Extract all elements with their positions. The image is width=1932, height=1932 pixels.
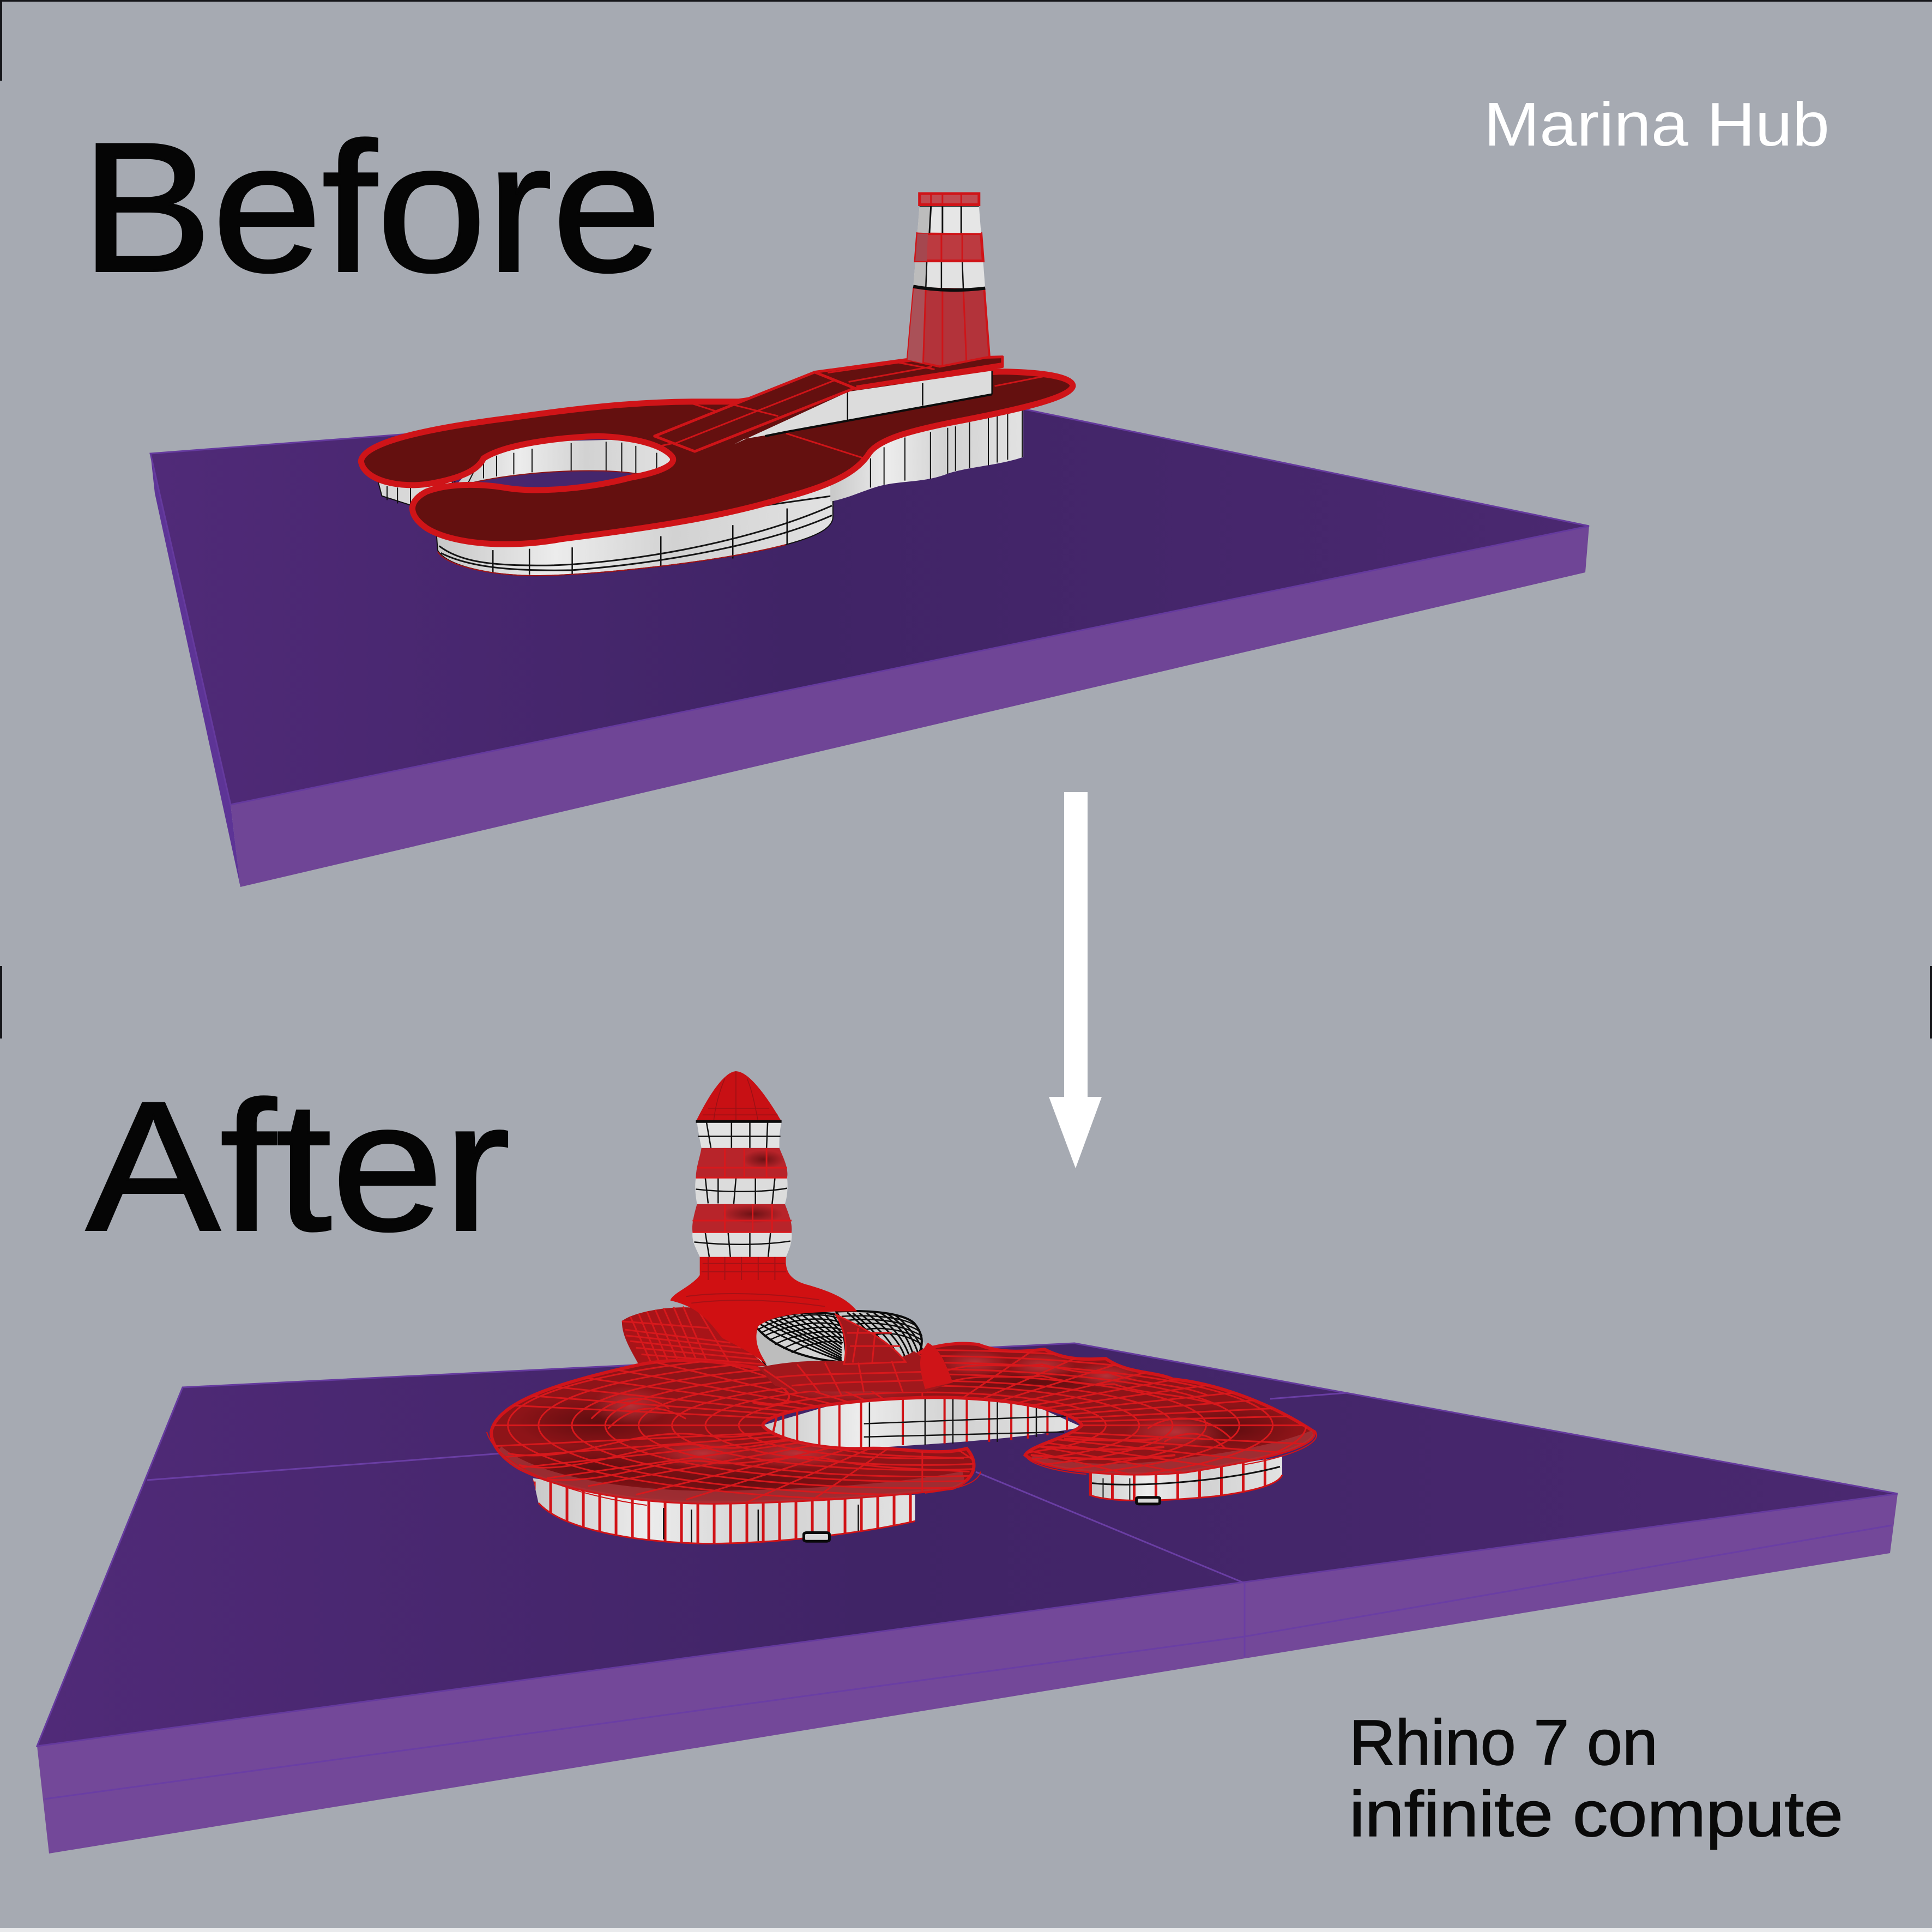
roof surface [491,1344,1314,1503]
heading: Before: Before [81,104,662,310]
tower flared base [671,1257,857,1365]
tower white band upper [697,1122,782,1148]
roof grid radials [495,1353,1305,1502]
left ground wall [533,1478,917,1544]
inner courtyard wall [763,1397,1082,1448]
tower red band [915,234,983,261]
right ground wall [1089,1457,1284,1501]
label: Marina Hub: Marina Hub [1484,90,1830,159]
slab front side [231,526,1589,887]
long block wall [734,371,992,444]
slab seams [45,1393,1892,1799]
shell backing [756,1313,931,1373]
slab side [37,1494,1898,1853]
arch over shells [758,1315,953,1396]
raised roof lobe [622,1307,766,1371]
lighthouse tower [908,194,989,366]
mesh roof [486,1342,1317,1506]
inner courtyard wall [452,439,675,489]
slab top [37,1343,1898,1746]
right curved wall [830,410,1023,502]
label: Rhino 7 on infinite compute [1349,1707,1843,1850]
left arm wall [378,475,455,505]
label: Rhino 7 on infinite compute: Rhino 7 on [1349,1707,1658,1779]
outer edge curve [487,1430,1317,1505]
ramp and deck [655,357,1003,451]
black mesh shells [694,1305,931,1373]
panel: after slab [37,1343,1898,1853]
organic tower [671,1071,857,1365]
arrow [1049,792,1102,1168]
tower white band lower [692,1232,792,1257]
tower red band upper [696,1148,787,1178]
right ground door [1137,1498,1160,1504]
left ground door [804,1533,829,1541]
lower curved wall [437,484,833,576]
tower white band lower [913,262,985,289]
roof slab [361,372,1073,544]
tower red band lower [692,1204,792,1232]
panel: after building model [486,1071,1317,1545]
roof shading [495,1349,1314,1503]
tower white band mid [695,1178,788,1204]
dense mesh near the hole [753,1379,1175,1459]
roof wavy contours [508,1365,1231,1480]
slab left side [150,454,240,887]
roof grid rings [508,1350,1337,1501]
label: Rhino 7 on infinite compute: infinite compute [1349,1778,1843,1850]
panel: before building model [361,194,1073,576]
tower dome [696,1071,782,1121]
tower white band upper [917,206,981,233]
panel: before slab [150,393,1589,887]
tower cap [920,194,979,205]
tower base band [908,289,989,366]
heading: After: After [86,1063,510,1269]
slab top [150,393,1589,805]
crop marks [0,0,1932,1039]
small dark shards [730,1336,765,1365]
roof seams [661,376,1044,458]
